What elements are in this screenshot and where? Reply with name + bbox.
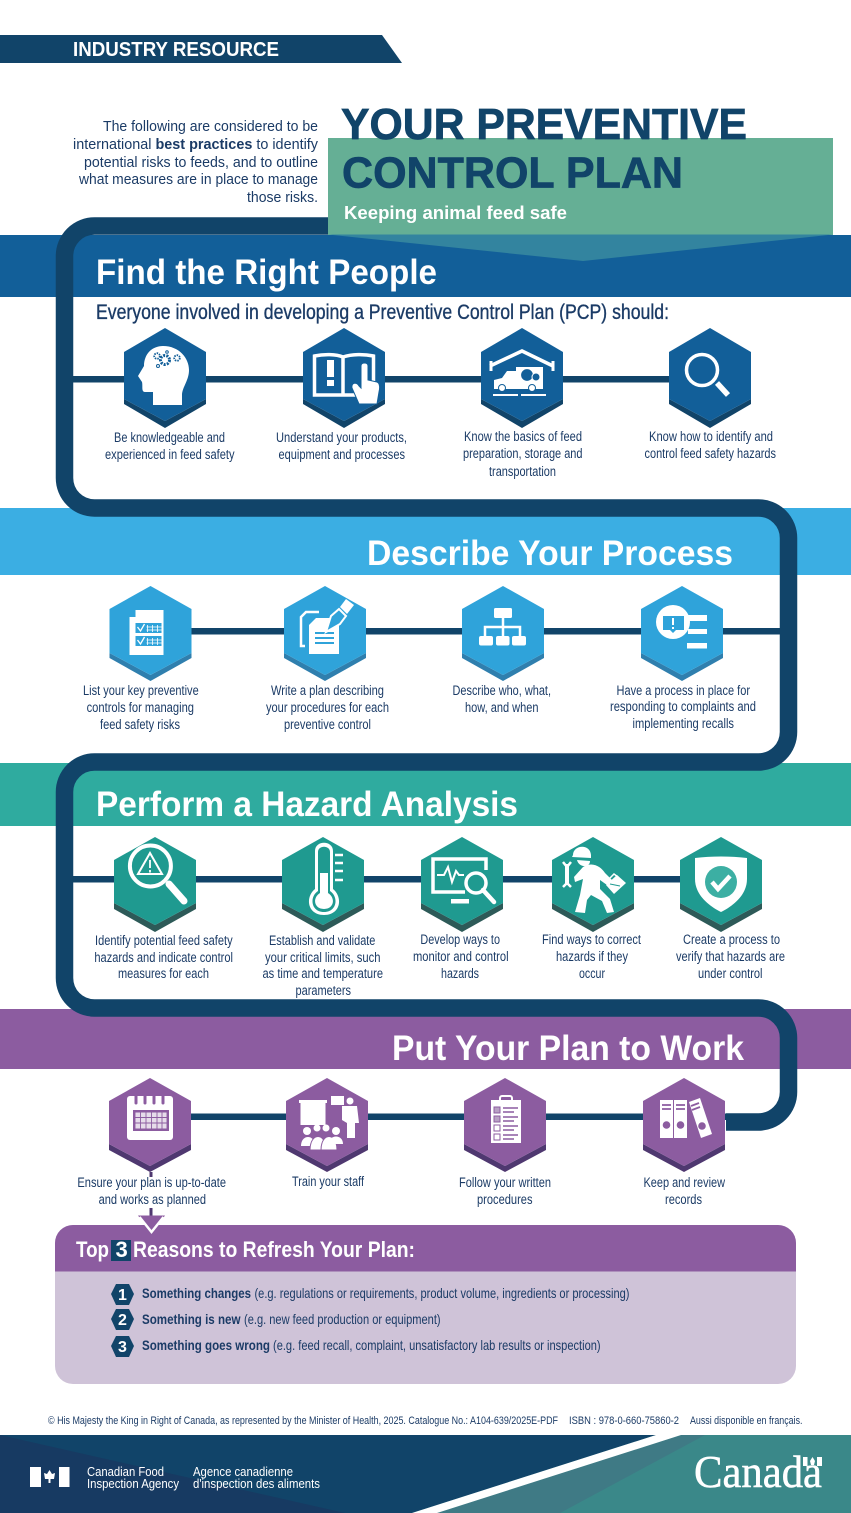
step: list controls <box>83 586 199 732</box>
step: complaints and recalls <box>610 586 756 731</box>
heading: describe your process: Describe Your Process <box>367 534 733 573</box>
subheading: Everyone involved in developing a Preventive Control Plan (PCP) should: <box>96 301 669 324</box>
heading: find the right people: Find the Right People <box>96 253 437 292</box>
subtitle: Keeping animal feed safe <box>344 203 567 223</box>
step: complaints and recalls: responding to complaints and <box>610 699 756 714</box>
panel: put your plan to work <box>0 1009 851 1207</box>
title block: CONTROL PLAN <box>342 148 683 198</box>
arrow: link to reasons panel <box>138 1172 165 1234</box>
step: write plan: your procedures for each <box>266 700 389 715</box>
step: verify hazards: Create a process to <box>683 932 780 947</box>
step: plan up to date: and works as planned <box>99 1192 206 1207</box>
reason 1 <box>111 1284 630 1305</box>
step: critical limits: as time and temperature <box>262 966 383 981</box>
step: follow procedures <box>459 1078 551 1207</box>
step: write plan: Write a plan describing <box>271 683 384 698</box>
title pointer <box>328 234 833 261</box>
step: keep records: records <box>665 1192 702 1207</box>
intro text: potential risks to feeds, and to outline <box>84 155 318 171</box>
step: knowledgeable: experienced in feed safety <box>105 447 235 462</box>
step: monitor hazards: monitor and control <box>413 949 509 964</box>
title block <box>328 100 833 261</box>
agency name english <box>87 1465 180 1491</box>
reason 3: Something goes wrong <box>142 1337 270 1353</box>
reason 3 <box>111 1336 601 1357</box>
agency name english: Canadian Food <box>87 1465 164 1479</box>
reason 2: Something is new <box>142 1311 241 1327</box>
panel body <box>55 1225 796 1384</box>
title: YOUR PREVENTIVE <box>341 100 747 149</box>
connector line <box>150 1114 726 1120</box>
step: who what how when: how, and when <box>465 700 538 715</box>
step: understand products: Understand your products, <box>276 430 407 445</box>
heading: put your plan to work: Put Your Plan to Work <box>392 1029 745 1068</box>
step: plan up to date <box>77 1078 226 1207</box>
panel: find the right people <box>0 235 851 479</box>
step: follow procedures: Follow your written <box>459 1175 551 1190</box>
step: monitor hazards <box>413 837 509 981</box>
heading: top 3 reasons: Reasons to Refresh Your Plan: <box>133 1237 415 1262</box>
step: follow procedures: procedures <box>477 1192 533 1207</box>
step: understand products: equipment and processes <box>278 447 405 462</box>
reason 3: (e.g. feed recall, complaint, unsatisfactory lab results or inspection) <box>273 1337 601 1353</box>
band: describe your process <box>0 508 851 575</box>
step: keep records: Keep and review <box>644 1175 725 1190</box>
track: winding path <box>64 226 788 1122</box>
step: monitor hazards: Develop ways to <box>420 932 500 947</box>
step: verify hazards <box>676 837 785 981</box>
intro text: those risks. <box>247 190 318 206</box>
step: correct hazards: occur <box>579 966 605 981</box>
heading: perform a hazard analysis: Perform a Hazard Analysis <box>96 785 518 824</box>
connector line <box>150 628 782 634</box>
step: understand products <box>276 328 407 462</box>
intro text: what measures are in place to manage <box>78 172 318 188</box>
reason 1: 1 <box>118 1287 127 1304</box>
step: knowledgeable: Be knowledgeable and <box>114 430 225 445</box>
step: identify hazards: control feed safety hazards <box>644 446 776 461</box>
panel: perform a hazard analysis <box>0 763 851 998</box>
copyright line: Aussi disponible en français. <box>690 1415 802 1427</box>
step: feed basics <box>463 328 582 479</box>
step: plan up to date: Ensure your plan is up-to-date <box>77 1175 226 1190</box>
canada wordmark: Canada <box>694 1446 822 1497</box>
step: who what how when: Describe who, what, <box>452 683 551 698</box>
step: who what how when <box>452 586 551 715</box>
step: complaints and recalls: Have a process in place for <box>616 683 750 698</box>
banner: industry resource: INDUSTRY RESOURCE <box>73 39 279 61</box>
intro text <box>73 119 319 206</box>
step: verify hazards: under control <box>698 966 762 981</box>
step: monitor hazards: hazards <box>441 966 479 981</box>
band: find the right people <box>0 235 851 297</box>
step: identify hazards <box>644 328 776 461</box>
connector line <box>70 876 721 882</box>
footer <box>0 1435 851 1513</box>
heading: top 3 reasons: 3 <box>116 1237 128 1262</box>
step: list controls: List your key preventive <box>83 683 199 698</box>
step: correct hazards: Find ways to correct <box>542 932 641 947</box>
reason 3: 3 <box>118 1339 127 1356</box>
step: critical limits: Establish and validate <box>269 933 375 948</box>
reason 2: (e.g. new feed production or equipment) <box>244 1311 441 1327</box>
reason 1: Something changes <box>142 1285 251 1301</box>
step: train staff: Train your staff <box>292 1174 364 1189</box>
agency name french: d'inspection des aliments <box>193 1477 320 1491</box>
copyright line: ISBN : 978-0-660-75860-2 <box>569 1415 679 1427</box>
step: correct hazards <box>542 837 641 981</box>
step: write plan <box>266 586 389 732</box>
intro text: international best practices to identify <box>73 137 319 153</box>
agency logo flag <box>30 1467 70 1487</box>
panel: top 3 reasons <box>55 1225 796 1384</box>
reason 2: 2 <box>118 1312 127 1329</box>
step: knowledgeable <box>105 328 235 462</box>
step: critical limits <box>262 837 383 998</box>
heading: top 3 reasons: Top <box>76 1237 109 1262</box>
step: identify potential hazards: measures for each <box>118 966 209 981</box>
panel header <box>55 1225 796 1272</box>
step: feed basics: preparation, storage and <box>463 446 582 461</box>
step: feed basics: Know the basics of feed <box>464 429 582 444</box>
connector line <box>70 376 710 382</box>
copyright line: © His Majesty the King in Right of Canada, as represented by the Minister of Health, 2025. Catalogue No.: A104-639/2025E-PDF <box>48 1415 558 1427</box>
step: complaints and recalls: implementing recalls <box>632 716 734 731</box>
step: list controls: feed safety risks <box>100 717 180 732</box>
banner: industry resource <box>0 35 402 63</box>
step: train staff <box>286 1078 368 1189</box>
reason 2 <box>111 1309 441 1330</box>
band: perform a hazard analysis <box>0 763 851 826</box>
step: critical limits: parameters <box>296 983 351 998</box>
agency name french <box>193 1465 320 1491</box>
step: write plan: preventive control <box>284 717 371 732</box>
intro text: The following are considered to be <box>103 119 318 135</box>
step: critical limits: your critical limits, such <box>265 950 380 965</box>
green title box <box>328 138 833 235</box>
agency name english: Inspection Agency <box>87 1477 180 1491</box>
step: correct hazards: hazards if they <box>556 949 628 964</box>
agency name french: Agence canadienne <box>193 1465 293 1479</box>
panel: describe your process <box>0 508 851 732</box>
step: identify potential hazards: Identify potential feed safety <box>95 933 233 948</box>
step: feed basics: transportation <box>489 464 556 479</box>
step: identify hazards: Know how to identify and <box>649 429 773 444</box>
step: verify hazards: verify that hazards are <box>676 949 785 964</box>
step: identify potential hazards <box>94 837 233 981</box>
step: list controls: controls for managing <box>87 700 194 715</box>
reason 1: (e.g. regulations or requirements, product volume, ingredients or processing) <box>254 1285 630 1301</box>
step: keep records <box>643 1078 725 1207</box>
step: identify potential hazards: hazards and indicate control <box>94 950 233 965</box>
band: put your plan to work <box>0 1009 851 1069</box>
